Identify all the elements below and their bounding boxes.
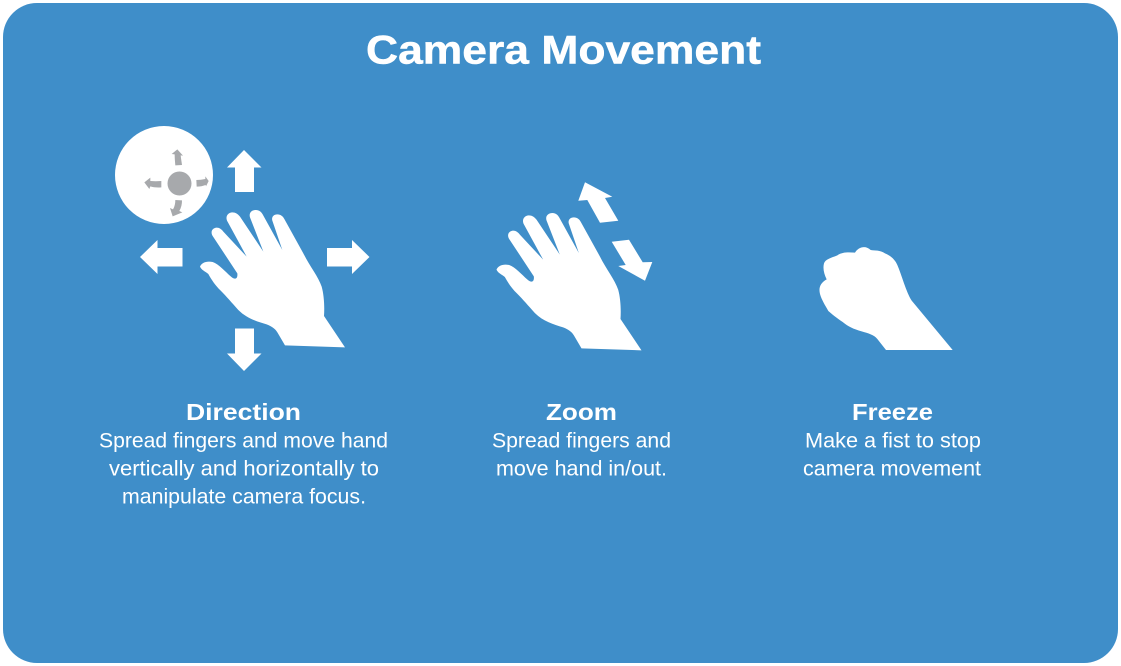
icon: arrow down <box>227 328 262 371</box>
text: direction description: vertically and horizontally to <box>109 458 379 480</box>
icon: arrow down-right <box>612 240 652 281</box>
heading: freeze: Freeze <box>852 399 933 425</box>
panel: direction <box>99 126 388 508</box>
text: freeze description <box>803 430 981 480</box>
panel: freeze <box>803 247 981 480</box>
heading: zoom: Zoom <box>546 399 617 425</box>
text: direction description <box>99 430 388 508</box>
icon: arrow left <box>140 240 182 274</box>
text: zoom description <box>492 430 671 480</box>
text: freeze description: Make a fist to stop <box>805 430 981 452</box>
icon: arrow up <box>227 150 262 192</box>
panel: zoom <box>492 182 671 481</box>
icon: arrow right <box>327 240 370 274</box>
icon: circle with gray direction arrows <box>115 126 213 224</box>
text: freeze description: camera movement <box>803 458 981 480</box>
text: zoom description: Spread fingers and <box>492 430 671 452</box>
icon: open hand <box>496 213 641 350</box>
text: direction description: Spread fingers and move hand <box>99 430 388 452</box>
icon: open hand <box>200 210 345 347</box>
title: Camera Movement <box>366 28 761 72</box>
heading: direction: Direction <box>186 399 301 425</box>
icon: fist <box>819 247 953 350</box>
text: zoom description: move hand in/out. <box>496 458 667 480</box>
text: direction description: manipulate camera focus. <box>122 486 366 508</box>
icon: arrow up-left <box>578 182 618 223</box>
